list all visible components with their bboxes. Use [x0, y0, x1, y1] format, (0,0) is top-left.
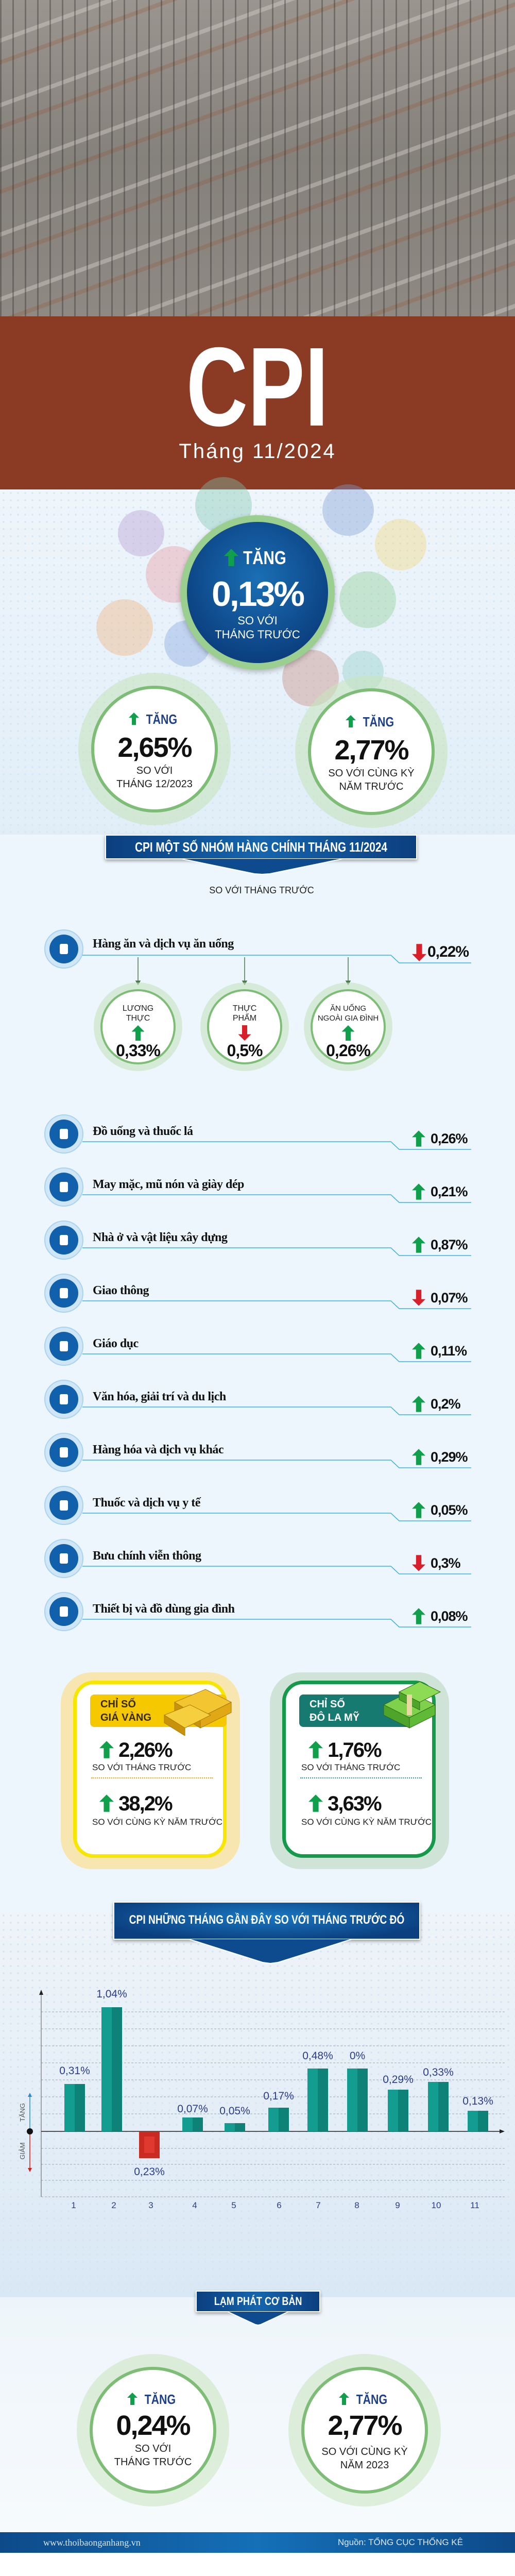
- row: post and telecom: 0,3%: [431, 1555, 460, 1571]
- bar chart: CPI monthly change: 6: [277, 2200, 282, 2210]
- row: post and telecom: [44, 1539, 471, 1578]
- bar chart: CPI monthly change: 0,23%: [134, 2166, 165, 2178]
- row: other goods: 0,29%: [431, 1449, 468, 1465]
- label: TĂNG: TĂNG: [243, 547, 286, 568]
- sub-circle: eating out: 0,26%: [326, 1041, 370, 1060]
- tab: dollar: [299, 1694, 413, 1727]
- circle: 2,77% vs same period: [295, 675, 448, 828]
- section heading: CPI groups: CPI MỘT SỐ NHÓM HÀNG CHÍNH THÁNG 11/2024: [135, 839, 387, 855]
- label: TĂNG: [224, 547, 286, 568]
- circle: core 2,77%: NĂM 2023: [340, 2460, 389, 2471]
- row: culture and tourism: Văn hóa, giải trí và du lịch: [93, 1390, 226, 1403]
- panel: recent months chart background: [0, 1912, 515, 2297]
- sub-circle: staple food: [94, 982, 182, 1071]
- panel: gold price index: [61, 1672, 240, 1869]
- row: culture and tourism: 0,2%: [431, 1396, 460, 1412]
- main circle: 0,13%: [180, 515, 335, 670]
- subheading: compared with previous month: SO VỚI THÁNG TRƯỚC: [209, 885, 314, 895]
- panel: core inflation: [0, 2297, 515, 2532]
- section heading: core inflation: LẠM PHÁT CƠ BẢN: [214, 2295, 302, 2308]
- value: 38,2%: 38,2%: [118, 1792, 172, 1815]
- circle: core 0,24%: [77, 2354, 229, 2506]
- row: transport: 0,07%: [431, 1290, 468, 1306]
- circle: 2,77% vs same period: SO VỚI CÙNG KỲ: [328, 768, 415, 779]
- caption: THÁNG TRƯỚC: [215, 628, 300, 641]
- bar chart: CPI monthly change: 0,17%: [263, 2090, 294, 2102]
- circle: core 2,77%: TĂNG: [356, 2392, 387, 2407]
- bar chart: CPI monthly change: 9: [395, 2200, 400, 2210]
- row: housing: [44, 1221, 471, 1260]
- sub-circle: staple food: THỰC: [126, 1014, 150, 1023]
- row: beverages and tobacco: Đồ uống và thuốc lá: [93, 1125, 193, 1138]
- sub-circle: eating out: NGOÀI GIA ĐÌNH: [318, 1014, 379, 1023]
- value: 2,26%: 2,26%: [118, 1739, 172, 1761]
- row: household appliances: Thiết bị và đồ dùng gia đình: [93, 1602, 234, 1616]
- row: food and catering: 0,22%: [427, 943, 469, 960]
- row: transport: Giao thông: [93, 1284, 149, 1297]
- subtitle: month: Tháng 11/2024: [179, 440, 336, 463]
- circle: core 2,77%: 2,77%: [328, 2410, 402, 2441]
- caption: [215, 614, 300, 641]
- bar chart: CPI monthly change: 0,33%: [423, 2066, 454, 2078]
- bar chart: CPI monthly change: 0,07%: [177, 2103, 208, 2115]
- circle: core 2,77%: SO VỚI CÙNG KỲ: [321, 2446, 408, 2458]
- panel: US dollar index: [270, 1672, 449, 1869]
- section heading: recent months: [111, 1901, 422, 1964]
- sub-circle: foodstuff: PHẨM: [233, 1014, 256, 1023]
- row: medicine and health: Thuốc và dịch vụ y tế: [93, 1496, 200, 1510]
- bar chart: CPI monthly change: [19, 1988, 505, 2210]
- row: medicine and health: 0,05%: [431, 1502, 468, 1518]
- row: garments: May mặc, mũ nón và giày dép: [93, 1178, 244, 1191]
- row: other goods: Hàng hóa và dịch vụ khác: [93, 1443, 224, 1456]
- panel: US dollar index: SO VỚI THÁNG TRƯỚC: [301, 1762, 400, 1772]
- axis legend: increase/decrease: GIẢM: [19, 2142, 26, 2160]
- row: medicine and health: [44, 1486, 471, 1525]
- value: 3,63%: 3,63%: [328, 1792, 381, 1815]
- icon: dollar stacks: [383, 1682, 441, 1728]
- row: transport: [44, 1274, 471, 1313]
- circle: 2,77% vs same period: TĂNG: [363, 714, 394, 730]
- panel: US dollar index: SO VỚI CÙNG KỲ NĂM TRƯỚC: [301, 1817, 432, 1827]
- bar chart: CPI monthly change: 1,04%: [96, 1988, 127, 2000]
- section heading: recent months: CPI NHỮNG THÁNG GẦN ĐÂY SO VỚI THÁNG TRƯỚC ĐÓ: [129, 1913, 404, 1927]
- axis legend: increase/decrease: TĂNG: [19, 2103, 26, 2122]
- bar chart: CPI monthly change: 11: [470, 2200, 479, 2210]
- row: food and catering: [44, 929, 471, 985]
- caption: SO VỚI: [237, 614, 278, 627]
- panel: gold price index: SO VỚI THÁNG TRƯỚC: [92, 1762, 191, 1772]
- axis legend: increase/decrease: [19, 2093, 33, 2172]
- bar chart: CPI monthly change: 2: [111, 2200, 116, 2210]
- bar chart: CPI monthly change: 5: [231, 2200, 236, 2210]
- circle: 2,65% vs Dec 2023: [78, 673, 231, 825]
- section heading: core inflation: [194, 2290, 322, 2326]
- row: garments: 0,21%: [431, 1184, 468, 1199]
- row: education: Giáo dục: [93, 1337, 139, 1350]
- circle: 2,77% vs same period: NĂM TRƯỚC: [339, 781, 403, 792]
- bar chart: CPI monthly change: 0%: [350, 2050, 365, 2062]
- sub-circle: eating out: ĂN UỐNG: [330, 1004, 366, 1013]
- circle: 2,65% vs Dec 2023: TĂNG: [146, 711, 177, 727]
- row: other goods: [44, 1433, 471, 1472]
- circle: 2,65% vs Dec 2023: SO VỚI: [136, 765, 173, 776]
- sub-circle: foodstuff: [200, 982, 289, 1071]
- row: garments: [44, 1167, 471, 1207]
- circle: core 0,24%: THÁNG TRƯỚC: [114, 2456, 192, 2468]
- circle: 2,65% vs Dec 2023: 2,65%: [117, 732, 192, 763]
- tab: dollar: ĐÔ LA MỸ: [310, 1712, 359, 1723]
- bar chart: CPI monthly change: 4: [192, 2200, 197, 2210]
- title band: [0, 316, 515, 489]
- panel: gold price index: SO VỚI CÙNG KỲ NĂM TRƯỚC: [92, 1817, 222, 1827]
- circle: core 0,24%: TĂNG: [144, 2392, 176, 2407]
- row: housing: 0,87%: [431, 1237, 468, 1252]
- row: household appliances: 0,08%: [431, 1608, 468, 1624]
- bar chart: CPI monthly change: 0,31%: [59, 2065, 90, 2077]
- header photo: concrete blocks: [0, 0, 515, 316]
- tab: dollar: CHỈ SỐ: [310, 1699, 345, 1710]
- row: beverages and tobacco: 0,26%: [431, 1131, 468, 1146]
- row: beverages and tobacco: [44, 1114, 471, 1154]
- footer: [0, 2532, 515, 2553]
- bar chart: CPI monthly change: 0,13%: [462, 2095, 493, 2107]
- bar chart: CPI monthly change: 0,48%: [302, 2050, 333, 2062]
- row: post and telecom: Bưu chính viễn thông: [93, 1549, 201, 1563]
- value: 1,76%: 1,76%: [328, 1739, 381, 1761]
- circle: 2,77% vs same period: 2,77%: [334, 735, 408, 766]
- title: CPI: CPI: [186, 325, 329, 450]
- icon: gold bars: [164, 1689, 232, 1736]
- bar chart: CPI monthly change: 3: [148, 2200, 153, 2210]
- circle: core 2,77%: [288, 2354, 441, 2506]
- circle: core 0,24%: 0,24%: [116, 2410, 190, 2441]
- circle: 2,65% vs Dec 2023: THÁNG 12/2023: [116, 778, 193, 790]
- tab: gold: [90, 1694, 227, 1727]
- row: culture and tourism: [44, 1380, 471, 1419]
- sub-circle: eating out: [304, 982, 392, 1071]
- bar chart: CPI monthly change: 0,29%: [383, 2074, 414, 2086]
- row: housing: Nhà ở và vật liệu xây dựng: [93, 1231, 227, 1244]
- footer: source: Nguồn: TỔNG CỤC THỐNG KÊ: [338, 2537, 463, 2547]
- bar chart: CPI monthly change: 7: [316, 2200, 321, 2210]
- bar chart: CPI monthly change: 10: [432, 2200, 441, 2210]
- row: food and catering: Hàng ăn và dịch vụ ăn uống: [93, 937, 234, 951]
- row: education: 0,11%: [431, 1343, 467, 1359]
- row: education: [44, 1327, 471, 1366]
- sub-circle: staple food: 0,33%: [116, 1041, 160, 1060]
- footer: website: www.thoibaonganhang.vn: [43, 2537, 141, 2548]
- bar chart: CPI monthly change: 8: [354, 2200, 359, 2210]
- tab: gold: GIÁ VÀNG: [100, 1712, 151, 1723]
- decorative pastel icons: [96, 477, 426, 706]
- row: household appliances: [44, 1592, 471, 1631]
- circle: core 0,24%: SO VỚI: [135, 2443, 171, 2454]
- bar chart: CPI monthly change: 1: [71, 2200, 76, 2210]
- sub-circle: foodstuff: THỰC: [233, 1004, 256, 1013]
- sub-circle: foodstuff: 0,5%: [227, 1041, 262, 1060]
- bar chart: CPI monthly change: 0,05%: [219, 2105, 250, 2117]
- value: 0,13%: [212, 574, 303, 614]
- section heading: CPI groups: [103, 834, 419, 875]
- tab: gold: CHỈ SỐ: [100, 1699, 136, 1710]
- panel: headline CPI circles: [0, 489, 515, 835]
- sub-circle: staple food: LƯƠNG: [123, 1004, 153, 1013]
